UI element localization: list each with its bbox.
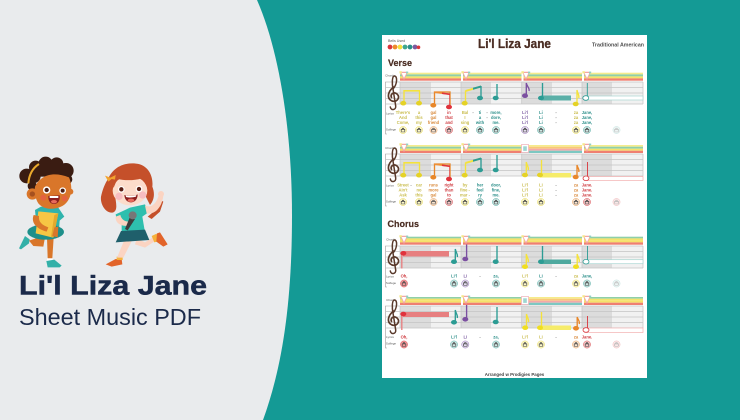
system 4: Lyrics bbox=[386, 335, 394, 339]
subtitle: Sheet Music PDF: Sheet Music PDF bbox=[19, 304, 201, 330]
system 2: door, bbox=[491, 182, 501, 187]
system 1: friend bbox=[428, 120, 440, 125]
system 2: runs bbox=[429, 182, 439, 187]
system 1: Li'l bbox=[522, 120, 528, 125]
system 1: I bbox=[464, 115, 466, 120]
system 2: - bbox=[555, 192, 557, 198]
composer credit: Traditional American bbox=[592, 42, 644, 48]
system 1: that bbox=[445, 115, 453, 120]
system 1: za bbox=[574, 115, 579, 120]
system 1: - bbox=[555, 120, 557, 125]
system 4: Li'l bbox=[451, 334, 457, 340]
system 1 bbox=[385, 71, 643, 134]
system 1: in bbox=[447, 110, 451, 115]
system 3 bbox=[386, 235, 643, 287]
system 3: Li'l bbox=[451, 274, 457, 278]
system 1: Li'l bbox=[522, 115, 528, 120]
system 1: more, bbox=[490, 110, 502, 115]
system 1: Li bbox=[539, 115, 543, 120]
system 2: za bbox=[574, 182, 579, 187]
system 2: fine, bbox=[492, 188, 500, 192]
system 4: za, bbox=[493, 334, 499, 340]
system 2: right bbox=[444, 182, 454, 187]
system 3: za, bbox=[493, 274, 499, 278]
system 2: za bbox=[574, 188, 579, 192]
system 4: - bbox=[479, 334, 481, 340]
system 4: za bbox=[574, 334, 579, 340]
system 2: more bbox=[428, 188, 439, 192]
system 1: Come, bbox=[397, 120, 409, 125]
system 2: Chords bbox=[385, 146, 395, 150]
system 1: Jane, bbox=[582, 110, 592, 115]
system 2: feel bbox=[476, 188, 484, 192]
bells used legend bbox=[388, 39, 420, 49]
left curved panel bbox=[0, 0, 292, 420]
system 1: a bbox=[479, 115, 482, 120]
system 3: - bbox=[479, 274, 481, 278]
system 1: and bbox=[445, 120, 453, 125]
system 2: Li'l bbox=[522, 192, 528, 198]
system 3: Oh, bbox=[401, 274, 407, 278]
system 2: Li bbox=[539, 182, 543, 187]
system 2: mar - bbox=[460, 192, 471, 198]
system 1: a bbox=[418, 110, 421, 115]
system 4: Li'l bbox=[522, 334, 528, 340]
system 1: gal bbox=[431, 115, 436, 120]
system 1: - bbox=[555, 115, 557, 120]
system 1: me. bbox=[492, 120, 500, 125]
system 1: - bbox=[555, 110, 557, 115]
system 2: za bbox=[574, 192, 579, 198]
system 2: car bbox=[416, 182, 422, 187]
system 1: - bbox=[472, 110, 474, 115]
system 2: than bbox=[445, 188, 454, 192]
system 2: Li bbox=[539, 188, 543, 192]
system 4: Chords bbox=[386, 298, 396, 302]
system 2: gal bbox=[431, 192, 436, 198]
system 4: Oh, bbox=[401, 334, 407, 340]
system 1: dore, bbox=[491, 115, 501, 120]
heading: Verse: Verse bbox=[388, 58, 412, 68]
system 3: Jane, bbox=[582, 274, 592, 278]
bells used legend: Bells Used bbox=[388, 39, 405, 43]
system 1: this bbox=[415, 115, 423, 120]
system 1: Bal bbox=[462, 110, 468, 115]
system 4: - bbox=[555, 334, 557, 340]
illustration: girl with microphone bbox=[101, 163, 168, 267]
system 2: Li'l bbox=[522, 188, 528, 192]
system 1: ti bbox=[479, 110, 481, 115]
system 1: Li bbox=[539, 110, 543, 115]
system 2: this bbox=[415, 192, 423, 198]
system 3: Li bbox=[463, 274, 467, 278]
system 2: Solfege bbox=[386, 200, 396, 204]
system 1: And bbox=[399, 115, 407, 120]
system 3: - bbox=[555, 274, 557, 278]
system 4: Solfege bbox=[386, 342, 396, 346]
system 3: Li bbox=[539, 274, 543, 278]
system 2: Lyrics bbox=[386, 184, 394, 188]
system 4: Li bbox=[463, 334, 467, 340]
system 3: Chords bbox=[386, 238, 396, 242]
system 4 bbox=[386, 295, 643, 348]
panel: sheet music page bbox=[382, 35, 647, 378]
system 2: Ain't bbox=[399, 188, 408, 192]
system 1: - bbox=[486, 110, 488, 115]
system 2: Jane. bbox=[582, 182, 592, 187]
heading: Chorus: Chorus bbox=[388, 219, 419, 229]
system 1: There's bbox=[396, 110, 411, 115]
system 2: her bbox=[477, 182, 484, 187]
system 1: - bbox=[486, 115, 488, 120]
system 1: sing bbox=[461, 120, 470, 125]
title: Li'l Liza Jane: Li'l Liza Jane bbox=[19, 270, 207, 300]
system 3: Solfege bbox=[386, 281, 396, 285]
system 1: Li bbox=[539, 120, 543, 125]
system 2: ry bbox=[478, 192, 483, 198]
system 1: Lyrics bbox=[386, 112, 394, 116]
system 3: Li'l bbox=[522, 274, 528, 278]
system 2: Li bbox=[539, 192, 543, 198]
system 1: Jane, bbox=[582, 120, 592, 125]
system 2: Jane. bbox=[582, 188, 592, 192]
footer credit: Arranged w Prodigies Pages bbox=[485, 372, 545, 377]
sheet title: Li'l Liza Jane bbox=[478, 36, 551, 51]
illustration: girl with book bbox=[19, 157, 74, 267]
system 1: za bbox=[574, 110, 579, 115]
system 1: za bbox=[574, 120, 579, 125]
system 2: by bbox=[463, 182, 468, 187]
system 1: Li'l bbox=[522, 110, 528, 115]
system 1: with bbox=[475, 120, 485, 125]
system 2: Ask bbox=[399, 192, 407, 198]
system 2: Li'l bbox=[522, 182, 528, 187]
system 1: my bbox=[416, 120, 423, 125]
system 2: Street bbox=[397, 182, 409, 187]
system 1: gal bbox=[431, 110, 436, 115]
system 2 bbox=[385, 143, 643, 206]
system 2: - bbox=[410, 182, 412, 187]
system 2: - bbox=[555, 188, 557, 192]
system 1: Chords bbox=[385, 74, 395, 78]
system 2: fine - bbox=[460, 188, 471, 192]
system 4: Jane. bbox=[582, 334, 592, 340]
system 2: - bbox=[555, 182, 557, 187]
system 3: za bbox=[574, 274, 579, 278]
system 2: to bbox=[447, 192, 451, 198]
system 2: me. bbox=[492, 192, 500, 198]
system 3: Lyrics bbox=[386, 274, 394, 278]
system 2: Jane. bbox=[582, 192, 592, 198]
system 4: Li bbox=[539, 334, 543, 340]
system 1: Solfege bbox=[386, 128, 396, 132]
system 1: Jane, bbox=[582, 115, 592, 120]
system 2: no bbox=[416, 188, 422, 192]
